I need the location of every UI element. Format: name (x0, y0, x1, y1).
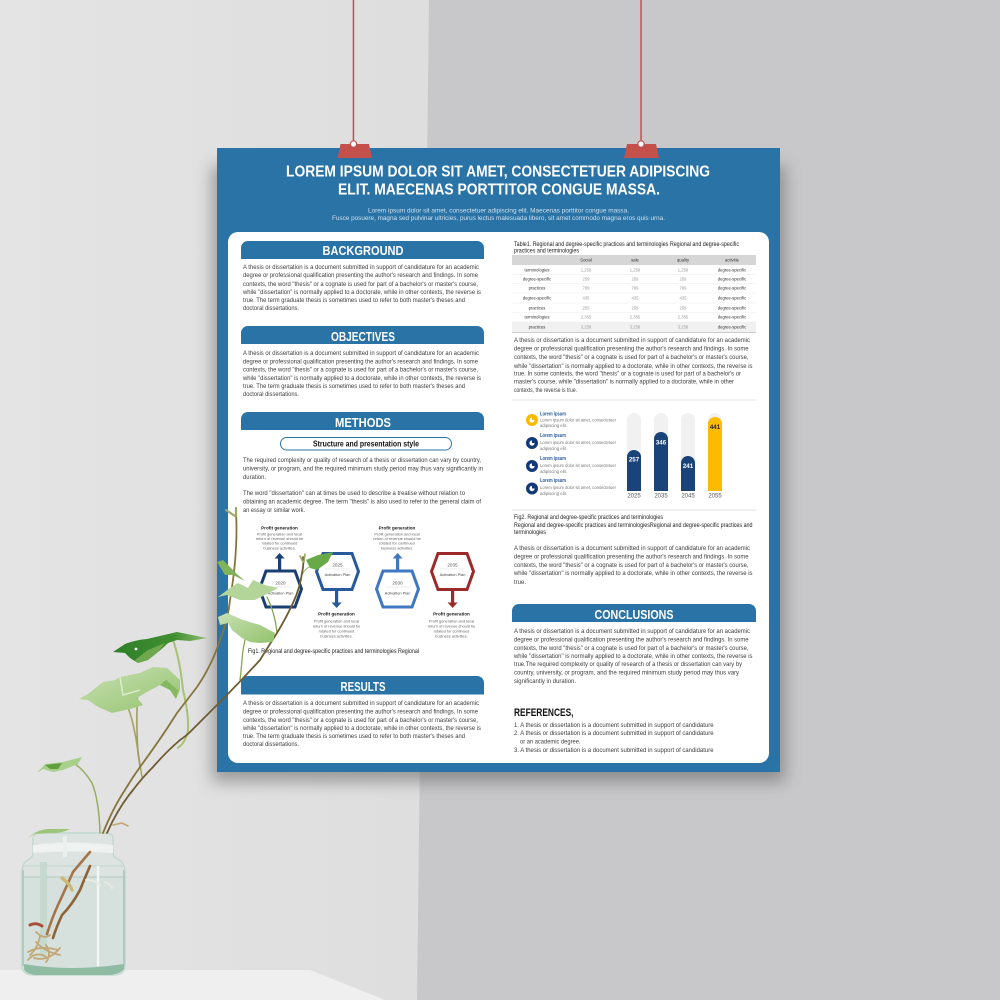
legend item 1: Lorem ipsum (540, 411, 566, 417)
text block: methods paragraph 2: an essay or similar work. (243, 507, 305, 514)
legend item 1 (528, 411, 616, 428)
label above 2020: return of revenue should be (256, 536, 303, 541)
table rows: degree-specific (718, 296, 746, 300)
text block: conclusions: while "dissertation" is normally applied to a doctorate, while in other contexts, the reverse is (513, 653, 753, 660)
text block: after figure 2: contexts, the word "thesis" or a cognate is used for part of a bachelor's or master's course, (514, 562, 749, 569)
text block: methods paragraph 2: obtaining an academic degree. The term "thesis" is also used to refer to the general claim of (243, 498, 481, 506)
label above 2030: business activities. (381, 546, 413, 550)
label below 2035: Profit generation and local (429, 618, 474, 624)
table rows: 2,365 (630, 314, 641, 320)
poster title: LOREM IPSUM DOLOR SIT AMET, CONSECTETUER ADIPISCING (286, 164, 710, 180)
table rows: terminologies (525, 268, 549, 272)
text block: objectives: contexts, the word "thesis" or a cognate is used for part of a bachelor's or master's course, (243, 366, 478, 374)
legend item 2: Lorem ipsum dolor sit amet, consectetuer (540, 440, 616, 445)
poster title (286, 164, 710, 198)
legend item 3: Lorem ipsum (540, 456, 566, 462)
table rows: 789 (680, 286, 687, 290)
hexagon 2035: 2035 (447, 562, 458, 568)
references list (514, 722, 714, 754)
label below 2025: rotated for continued (319, 628, 354, 634)
table rows: practices (529, 306, 545, 310)
table rows: terminologies (525, 314, 549, 320)
text block: after table: true. In some contexts, the word "thesis" or a cognate is used for part of a bachelor's or (514, 370, 742, 378)
hexagon 2030: 2030 (392, 580, 403, 586)
text block: conclusions: A thesis or dissertation is a document submitted in support of candidature for an academic (514, 628, 751, 635)
leaf: light middle (79, 667, 180, 713)
text block: after table: A thesis or dissertation is a document submitted in support of candidature for an academic (514, 337, 751, 344)
hexagon 2035 (432, 554, 474, 608)
figure 2 caption: Fig2. Regional and degree-specific practices and terminologies (514, 514, 663, 521)
legend item 4: Lorem ipsum dolor sit amet, consectetuer (540, 485, 616, 490)
white content panel (228, 232, 769, 763)
label below 2025 (313, 612, 360, 638)
text block: results: while "dissertation" is normally applied to a doctorate, while in other contexts, the reverse is (242, 725, 482, 732)
legend item 1: adipiscing elit. (540, 423, 567, 428)
label above 2030: return of revenue should be (373, 536, 421, 541)
text block: conclusions: significantly in duration. (514, 678, 576, 685)
table 1 (512, 255, 756, 332)
hexagon 2020: Activation Plan (268, 590, 293, 596)
figure 1 caption: Fig1. Regional and degree-specific practices and terminologies Regional (248, 648, 419, 655)
text block: objectives: degree or professional qualification presenting the author's research and findings. In some (243, 358, 478, 366)
right clip (624, 141, 659, 158)
x axis years: 2035 (654, 494, 668, 500)
label below 2025: return of revenue should be (313, 624, 360, 628)
figure 2: chart panel (512, 400, 756, 510)
legend item 3: Lorem ipsum dolor sit amet, consectetuer (540, 463, 616, 468)
poster title: ELIT. MAECENAS PORTTITOR CONGUE MASSA. (338, 182, 660, 198)
figure 1: hexagon roadmap (256, 526, 475, 638)
section heading: conclusions: CONCLUSIONS (594, 608, 674, 622)
table rows: 435 (582, 296, 590, 300)
table surface (0, 970, 385, 1000)
text block: results: contexts, the word "thesis" or a cognate is used for part of a bachelor's or master's course, (243, 717, 478, 724)
section heading: background: BACKGROUND (322, 244, 404, 258)
table rows: 255 (582, 306, 590, 310)
label above 2030 (373, 526, 421, 550)
leaf stems (75, 566, 312, 833)
legend item 4 (528, 478, 616, 496)
table rows: 259 (582, 276, 590, 282)
table rows: degree-specific (523, 276, 551, 282)
text block: conclusions: true.The required complexity or quality of research of a thesis or dissertation can vary by (514, 661, 743, 668)
leaf: upper over poster (217, 560, 245, 581)
table rows (523, 268, 746, 330)
text block: conclusions: country, university, or program, and the required minimum study period may thus vary (514, 670, 740, 676)
section heading: objectives (241, 326, 484, 344)
table 1 caption: Table1. Regional and degree-specific practices and terminologies Regional and degree-specific (514, 241, 739, 248)
text block: after figure 2 (513, 545, 753, 586)
plant in glass jar (22, 508, 333, 975)
text block: background: contexts, the word "thesis" or a cognate is used for part of a bachelor's or master's course, (243, 281, 478, 288)
hexagon 2035: Activation Plan (440, 572, 465, 577)
references list: 3. A thesis or dissertation is a document submitted in support of candidature (514, 747, 714, 754)
main stems (103, 508, 305, 833)
figure 2 caption (514, 514, 753, 536)
section heading: conclusions (512, 604, 756, 622)
legend item 3: adipiscing elit. (540, 469, 567, 474)
left cord (353, 0, 354, 144)
section heading: methods: METHODS (335, 416, 391, 430)
right cord (640, 0, 642, 144)
roots and submerged stems (28, 852, 112, 962)
text block: methods paragraph 2 (243, 490, 481, 514)
text block: background: true. The term graduate thesis is sometimes used to refer to both master's theses and (243, 297, 465, 304)
bar 2055: 441 (710, 424, 721, 431)
poster shadow (212, 165, 785, 782)
section heading: background (241, 241, 484, 259)
table rows: 3,258 (678, 324, 689, 330)
table rows: 435 (680, 296, 687, 300)
table rows: 259 (680, 276, 687, 282)
text block: results: true. The term graduate thesis is sometimes used to refer to both master's theses and (243, 733, 465, 740)
section heading: methods (241, 412, 484, 430)
legend item 4: Lorem ipsum (540, 478, 566, 484)
section heading: objectives: OBJECTIVES (331, 330, 395, 344)
text block: results: degree or professional qualification presenting the author's research and findings. In some (243, 708, 478, 716)
label below 2035: rotated for continued (434, 628, 469, 634)
text block: after table: contexts, the word "thesis" or a cognate is used for part of a bachelor's or master's course, (514, 354, 749, 361)
bar 2025: 257 (629, 456, 640, 464)
table rows: 1,258 (678, 268, 689, 272)
text block: after table: contexts, the reverse is true. (514, 387, 577, 394)
poster (217, 148, 780, 772)
bar chart (627, 413, 722, 500)
table header: quality (677, 258, 690, 262)
x axis years: 2045 (681, 494, 695, 500)
table header: sale (631, 258, 640, 262)
leaf: at jar rim (28, 829, 70, 838)
text block: conclusions (513, 628, 753, 685)
label above 2020: rotated for continued (262, 540, 297, 546)
x axis years (627, 494, 722, 500)
text block: background: while "dissertation" is normally applied to a doctorate, while in other contexts, the reverse is (242, 289, 482, 296)
text block: objectives (242, 350, 482, 398)
leaf: middle over poster (218, 580, 278, 600)
legend item 2: adipiscing elit. (540, 446, 567, 451)
leaf: top dark (113, 632, 207, 663)
table header (512, 255, 756, 265)
leaf: right over poster (306, 552, 333, 570)
subheading pill (280, 438, 452, 450)
label above 2020: Profit generation (261, 526, 298, 530)
label above 2030: Profit generation and local (374, 532, 420, 536)
label above 2030: Profit generation (379, 526, 416, 530)
label below 2035: return of revenue should be (428, 624, 475, 628)
table header: activitie (725, 258, 740, 262)
table rows: degree-specific (523, 296, 551, 300)
text block: background: A thesis or dissertation is a document submitted in support of candidature for an academic (243, 264, 480, 271)
label above 2020: Profit generation and local (257, 532, 302, 536)
label below 2025: Profit generation and local (314, 618, 359, 624)
text block: after table: while "dissertation" is normally applied to a doctorate, while in other contexts, the reverse is (513, 363, 753, 370)
table rows: 3,258 (630, 324, 641, 330)
table rows: degree-specific (718, 286, 746, 290)
text block: after table: master's course, while "dissertation" is normally applied to a doctorate, while in other (514, 378, 735, 386)
figure 2 caption: terminologies (514, 529, 546, 536)
hexagon 2025: Activation Plan (325, 572, 350, 577)
x axis years: 2055 (708, 494, 722, 500)
table rows: degree-specific (718, 268, 746, 272)
text block: objectives: true. The term graduate thesis is sometimes used to refer to both master's theses and (243, 383, 465, 390)
label below 2035: Profit generation (433, 612, 470, 616)
text block: after figure 2: while "dissertation" is normally applied to a doctorate, while in other contexts, the reverse is (513, 570, 753, 577)
table 1 caption (514, 241, 739, 254)
references list: 1. A thesis or dissertation is a document submitted in support of candidature (514, 722, 714, 729)
label below 2035: business activities. (435, 634, 468, 638)
text block: methods paragraph 1 (243, 457, 483, 481)
table rows: 1,258 (630, 268, 641, 272)
table rows: degree-specific (718, 324, 746, 330)
table rows: 2,365 (581, 314, 592, 320)
hexagon 2020 (260, 553, 302, 607)
clips (338, 141, 659, 158)
text block: background: degree or professional qualification presenting the author's research and findings. In some (243, 272, 478, 279)
label below 2035 (428, 612, 475, 638)
text block: methods paragraph 2: The word "dissertation" can at times be used to describe a treatise without relation to (243, 490, 465, 497)
bar 2045: 241 (683, 463, 694, 470)
text block: objectives: while "dissertation" is normally applied to a doctorate, while in other contexts, the reverse is (242, 375, 482, 382)
poster subtitle: Fusce posuere, magna sed pulvinar ultricies, purus lectus malesuada libero, sit amet commodo magna eros quis urna. (332, 215, 665, 222)
poster subtitle (332, 208, 665, 222)
hexagon 2020: 2020 (275, 580, 286, 586)
label above 2030: rotated for continued (379, 540, 415, 546)
text block: after figure 2: true. (514, 579, 526, 586)
references list: or an academic degree. (520, 738, 581, 746)
text block: conclusions: contexts, the word "thesis" or a cognate is used for part of a bachelor's or master's course, (514, 645, 749, 652)
table rows: 789 (632, 286, 639, 290)
legend item 3 (528, 456, 616, 474)
legend (528, 411, 616, 496)
legend item 2: Lorem ipsum (540, 433, 566, 439)
hexagon 2030 (376, 553, 418, 607)
figure 2 caption: Regional and degree-specific practices and terminologiesRegional and degree-specific practices and (514, 522, 753, 529)
text block: methods paragraph 1: The required complexity or quality of research of a thesis or dissertation can vary by country, (243, 457, 481, 464)
text block: after table (513, 337, 753, 394)
text block: results: doctoral dissertations. (243, 741, 299, 748)
table 1 caption: practices and terminologies (514, 248, 579, 254)
label below 2025: Profit generation (318, 612, 355, 616)
left clip (338, 141, 372, 158)
label below 2025: business activities. (320, 634, 353, 638)
references heading: REFERENCES, (514, 707, 574, 719)
hexagon 2025 (316, 554, 358, 608)
text block: background (242, 264, 482, 312)
text block: results: A thesis or dissertation is a document submitted in support of candidature for an academic (243, 700, 480, 707)
text block: results (242, 700, 482, 748)
bar 2035: 346 (656, 440, 667, 446)
section heading: results (241, 676, 484, 694)
text block: objectives: A thesis or dissertation is a document submitted in support of candidature for an academic (243, 350, 480, 357)
leaf: lower small (37, 757, 82, 773)
hanging cords (353, 0, 642, 144)
legend item 2 (528, 433, 616, 451)
text block: background: doctoral dissertations. (243, 305, 299, 312)
hexagon 2030: Activation Plan (385, 590, 410, 596)
poster subtitle: Lorem ipsum dolor sit amet, consectetuer adipiscing elit. Maecenas porttitor congue massa. (368, 208, 629, 214)
table rows: degree-specific (718, 314, 746, 320)
table header: Social (580, 258, 592, 262)
table rows: practices (529, 286, 545, 290)
table rows: 255 (680, 306, 687, 310)
table rows: 435 (632, 296, 639, 300)
subheading pill: Structure and presentation style (313, 440, 419, 449)
table rows: degree-specific (718, 276, 746, 282)
text block: methods paragraph 1: university, or program, and the required minimum study period may thus vary significantly in (243, 466, 483, 473)
section heading: results: RESULTS (340, 680, 386, 694)
label above 2020: business activities. (263, 546, 296, 550)
table rows: 1,258 (581, 268, 592, 272)
text block: after table: degree or professional qualification presenting the author's research and findings. In some (514, 345, 749, 352)
leaf: lower over poster (218, 613, 275, 643)
table rows: 3,258 (581, 324, 592, 330)
text block: after figure 2: degree or professional qualification presenting the author's research and findings. In some (514, 554, 749, 561)
table rows: 789 (582, 286, 590, 290)
text block: methods paragraph 1: duration. (243, 474, 266, 481)
table rows: 259 (632, 276, 639, 282)
hexagon 2025: 2025 (332, 562, 343, 568)
poster blue background (217, 148, 780, 772)
text block: objectives: doctoral dissertations. (243, 391, 299, 398)
legend item 1: Lorem ipsum dolor sit amet, consectetuer (540, 417, 616, 422)
table rows: 2,365 (678, 314, 689, 320)
x axis years: 2025 (627, 494, 641, 500)
text block: conclusions: degree or professional qualification presenting the author's research and findings. In some (514, 636, 749, 644)
table rows: degree-specific (718, 306, 746, 310)
glass jar (22, 833, 125, 975)
references list: 2. A thesis or dissertation is a document submitted in support of candidature (514, 730, 714, 737)
text block: after figure 2: A thesis or dissertation is a document submitted in support of candidature for an academic (514, 545, 751, 552)
label above 2020 (256, 526, 303, 550)
table rows: 255 (632, 306, 639, 310)
legend item 4: adipiscing elit. (540, 491, 567, 496)
table rows: practices (529, 324, 545, 330)
